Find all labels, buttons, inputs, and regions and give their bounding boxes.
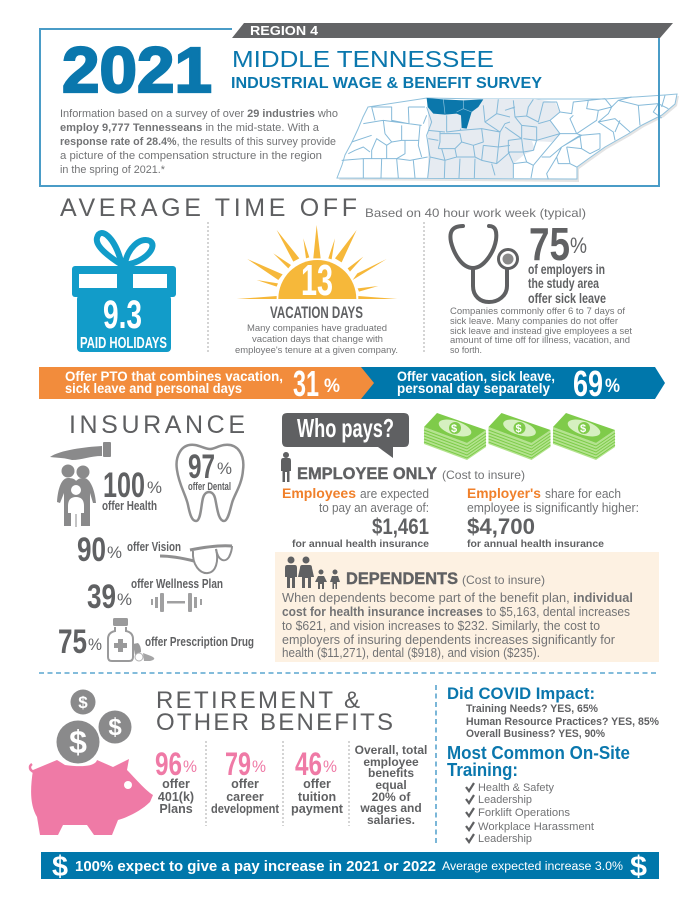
section: covid impact: Human Resource Practices? YES, 85% [466,716,659,728]
overall benefits text: benefits [368,766,414,780]
overall benefits text: 20% of [372,790,411,804]
panel: dependents: When dependents become part of the benefit plan, individual [282,591,633,605]
sick leave stat: offer sick leave [528,290,606,306]
stat: vision [77,531,232,573]
stat: health: offer Health [102,498,157,513]
stat: 401k: Plans [159,802,193,816]
employee share: Employees [282,485,356,501]
employee share: are expected [360,487,429,501]
sick leave stat [450,218,632,356]
employee share: to pay an average of: [319,501,429,515]
employer share: for annual health insurance [467,538,604,550]
arrow: combined PTO: % [324,376,340,397]
stat: wellness plan: 39 [87,578,116,616]
panel: dependents: employers of insuring dependents increases significantly for [282,633,615,647]
survey title: INDUSTRIAL WAGE & BENEFIT SURVEY [231,75,543,92]
section: who pays [275,413,659,662]
stat: wellness plan: % [117,590,132,609]
overall benefits text: equal [375,778,407,792]
arrow: separate time off: % [605,376,620,397]
panel: dependents [275,552,659,662]
section: retirement [30,687,427,835]
icon: hand over family [50,442,111,527]
icon: money stacks [424,413,615,460]
stat: tuition payment: payment [291,802,344,816]
panel: dependents: health ($11,271), dental ($918), and vision ($235). [282,646,540,660]
header panel [40,23,679,186]
intro text: employ 9,777 Tennesseans in the mid-state. With a [60,122,320,134]
overall benefits text: Overall, total [355,743,427,757]
employer share [467,485,639,550]
sick leave stat: the study area [528,275,599,291]
heading [60,194,586,222]
stat: vision: % [107,543,122,562]
pay increase footer bar: $ [630,851,647,883]
overall benefits text [355,743,427,827]
heading: RETIREMENT & [156,687,360,714]
overall benefits text: wages and [359,801,422,815]
region banner: REGION 4 [250,23,319,38]
stat: career development: development [211,802,280,816]
employee share: $1,461 [372,514,429,539]
section: on-site training: Most Common On-Site [447,743,630,763]
employer share: share for each [545,487,621,501]
icon: gift paid holidays: 9.3 [103,293,142,337]
employer share: Employer's [467,485,541,501]
arrow: separate time off: personal day separately [397,381,550,396]
icon: tooth dental: 97 [188,448,215,486]
sick leave stat: sick leave. Many companies do not offer [450,316,618,327]
overall benefits text: salaries. [367,813,415,827]
region banner [232,23,673,38]
intro text: response rate of 28.4%, the results of this survey provide [60,136,336,148]
icon: gift paid holidays: PAID HOLIDAYS [80,335,167,352]
arrow: combined PTO [39,363,374,404]
sick leave stat: % [570,233,587,258]
panel border [40,29,659,186]
section: covid impact: Did COVID Impact: [447,684,595,703]
icon: tooth dental: offer Dental [188,481,231,493]
icon: dumbbell [151,593,202,612]
arrow: combined PTO: Offer PTO that combines vacation, [65,369,283,384]
icon: glasses [160,546,232,573]
stat: prescription drug [58,618,254,661]
panel: dependents: DEPENDENTS [346,569,458,588]
sick leave stat: of employers in [528,261,605,277]
speech bubble: Who pays? [297,413,394,443]
intro text: Information based on a survey of over 29 industries who [60,108,338,120]
icon: sun vacation days: employee's tenure at a given company. [235,345,398,356]
employee share: for annual health insurance [292,538,429,550]
section: on-site training: Workplace Harassment [478,821,594,833]
stat: career development: 79 [225,746,251,782]
stat: career development: career [226,790,264,804]
stat: 401k: % [183,757,197,776]
intro text: a picture of the compensation structure in the region [60,150,322,162]
pay increase footer bar: $ [52,851,68,883]
section: on-site training: Leadership [478,833,532,845]
icon: piggy bank with coins: $ [78,693,88,712]
icon: pill bottle [108,618,154,661]
stat: vision: 90 [77,531,106,569]
stat: 401k: 401(k) [158,790,194,804]
employee only heading: EMPLOYEE ONLY [297,464,438,483]
heading: Based on 40 hour work week (typical) [365,206,586,220]
heading [156,687,393,736]
intro text [60,108,338,176]
employer share: $4,700 [467,514,535,539]
icon: piggy bank with coins [30,690,153,835]
arrow: combined PTO: 31 [293,363,319,404]
heading: AVERAGE TIME OFF [60,194,357,222]
arrow: combined PTO: sick leave and personal days [65,381,242,396]
icon: gift paid holidays [72,233,176,352]
stat: tuition payment [291,746,344,816]
PTO comparison banner [39,363,665,404]
icon: sun vacation days: 13 [301,256,333,305]
stat: 401k: offer [162,777,190,791]
stat: health: 100 [103,466,145,505]
employer share: employee is significantly higher: [467,501,639,515]
survey title: MIDDLE TENNESSEE [232,46,494,72]
stat: career development [211,746,280,816]
sick leave stat: sick leave and instead give employees a set [450,326,632,337]
panel: dependents: to $621, and vision increases to $232. Similarly, the cost to [282,619,600,633]
stat: tuition payment: tuition [298,790,336,804]
stat: wellness plan [87,576,223,616]
stat: tuition payment: offer [303,777,331,791]
section: covid impact: Training Needs? YES, 65% [466,703,598,715]
intro text: in the spring of 2021.* [60,164,166,176]
icon: tooth dental: % [217,459,232,478]
icon: family figures [285,556,340,589]
survey title [231,46,543,92]
employee only heading: (Cost to insure) [442,468,525,482]
stat: vision: offer Vision [127,539,181,554]
stat: tuition payment: % [323,757,337,776]
stat: prescription drug: offer Prescription Drug [145,634,254,649]
section: on-site training: Leadership [478,794,532,806]
stat: prescription drug: % [88,635,102,654]
sick leave stat: Companies commonly offer 6 to 7 days of [450,306,625,317]
section: average time off [60,194,632,356]
stat: career development: % [252,757,266,776]
heading: OTHER BENEFITS [156,709,393,736]
stat: 401k [155,746,197,816]
stat: career development: offer [231,777,259,791]
sick leave stat: amount of time off for illness, vacation, and [450,335,630,346]
stat: tuition payment: 46 [295,746,322,782]
section: on-site training: Health & Safety [478,782,554,794]
sick leave stat: so forth. [450,345,482,356]
arrow: separate time off: Offer vacation, sick leave, [397,369,555,384]
speech bubble [282,413,409,458]
stat: wellness plan: offer Wellness Plan [131,576,223,591]
heading: INSURANCE [69,411,245,439]
section: insurance [50,411,254,661]
stat: 401k: 96 [155,746,182,782]
section: covid impact [447,684,659,740]
section: on-site training [447,743,630,845]
icon: sun vacation days [235,225,398,356]
icon: sun vacation days: vacation days that change with [252,334,383,345]
stat: prescription drug: 75 [58,623,87,661]
pay increase footer bar: 100% expect to give a pay increase in 2021 or 2022 [75,858,436,875]
icon: sun vacation days: VACATION DAYS [270,303,363,322]
section: covid impact: Overall Business? YES, 90% [466,728,605,740]
panel: dependents: cost for health insurance increases to $5,163, dental increases [282,605,630,619]
pay increase footer bar [41,851,659,883]
sick leave stat: 75 [529,218,570,270]
section: on-site training: Training: [447,760,518,780]
section: on-site training: Forklift Operations [478,807,571,819]
arrow: separate time off [350,363,665,404]
icon: piggy bank with coins: $ [69,724,87,760]
employee only heading [281,452,525,483]
icon: piggy bank with coins: $ [108,714,122,741]
overall benefits text: employee [363,755,419,769]
pay increase footer bar: Average expected increase 3.0% [442,861,623,873]
stat: health: % [147,478,162,497]
employee share [282,485,429,550]
icon: tooth dental [177,445,243,521]
icon: stethoscope [450,226,518,302]
panel: dependents: (Cost to insure) [462,573,545,587]
arrow: separate time off: 69 [573,363,603,404]
year title: 2021 [62,34,212,106]
icon: sun vacation days: Many companies have graduated [247,323,387,334]
Tennessee map [337,94,679,182]
